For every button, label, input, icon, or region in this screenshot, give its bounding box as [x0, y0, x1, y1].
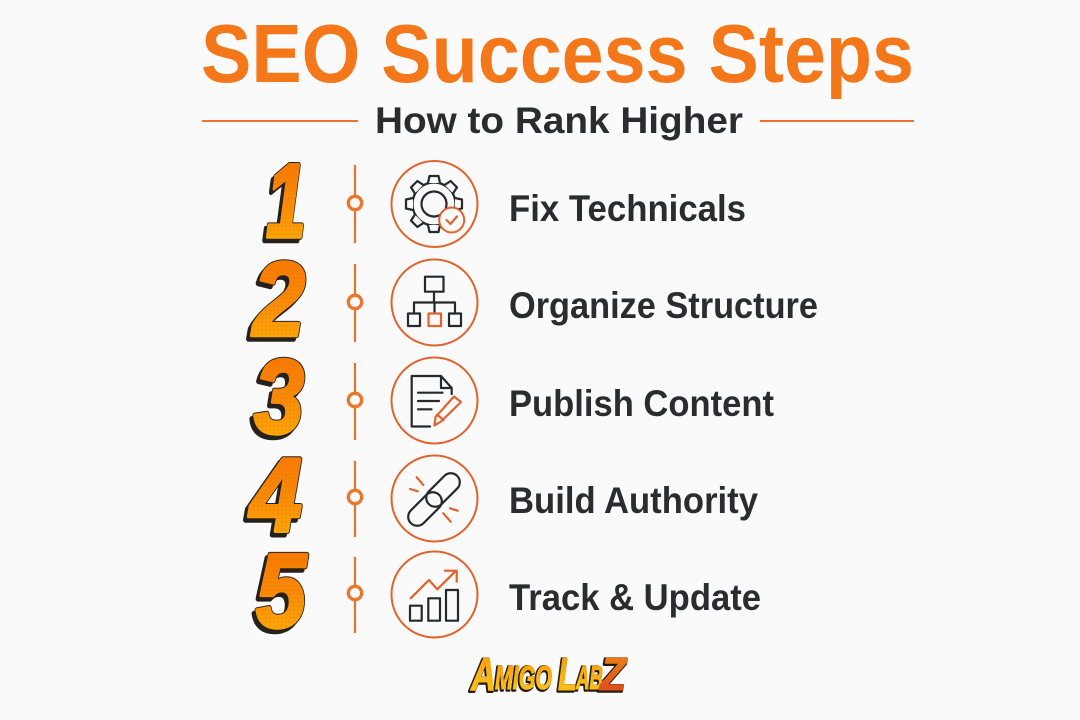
- logo: Amigo Labz: Z: [597, 649, 627, 701]
- number 5: 5: [256, 533, 307, 650]
- timeline node 4: [348, 461, 362, 537]
- logo: Amigo Labz: A: [470, 648, 496, 700]
- number 4: 4: [248, 437, 302, 554]
- number 4: 4: [248, 437, 302, 554]
- number 3: 3: [251, 342, 301, 460]
- number 4: 4: [248, 437, 302, 554]
- timeline node 3: [348, 363, 362, 440]
- number 3: 3: [254, 339, 304, 456]
- number 3: 3: [254, 339, 304, 456]
- label 2: Organize Structure: [509, 285, 818, 326]
- number 3: 3: [254, 339, 304, 456]
- number 2: 2: [251, 242, 305, 358]
- number 5: 5: [256, 533, 307, 650]
- step 5: track and update: [253, 533, 761, 654]
- number 2: 2: [248, 245, 302, 362]
- logo: Amigo Labz: [469, 648, 628, 701]
- icon: chain link: [392, 456, 478, 542]
- number 1: 1: [266, 143, 306, 260]
- logo: Amigo Labz: L: [557, 649, 576, 701]
- number 4: 4: [245, 440, 299, 558]
- logo: Amigo Labz: Z: [598, 648, 628, 700]
- timeline node 2: [348, 264, 362, 342]
- label 3: Publish Content: [509, 383, 774, 424]
- number 2: 2: [251, 242, 305, 358]
- icon: growth chart: [392, 552, 478, 638]
- step 2: organize structure: [248, 242, 818, 362]
- icon: hierarchy: [392, 260, 478, 346]
- timeline node 1: [348, 165, 362, 243]
- number 5: 5: [256, 533, 307, 650]
- step 4: build authority: [245, 437, 758, 558]
- label 4: Build Authority: [509, 480, 758, 521]
- logo: Amigo Labz: MIGO: [495, 659, 552, 696]
- number 1: 1: [263, 146, 303, 264]
- number 2: 2: [251, 242, 305, 358]
- number 1: 1: [266, 143, 306, 260]
- logo: Amigo Labz: L: [558, 648, 577, 700]
- logo: Amigo Labz: AB: [574, 660, 602, 697]
- subtitle with rules: How to Rank Higher: [375, 100, 743, 141]
- number 5: 5: [253, 536, 304, 654]
- logo: Amigo Labz: MIGO: [494, 660, 551, 697]
- title: SEO Success Steps: [201, 7, 914, 100]
- logo: Amigo Labz: A: [469, 649, 495, 701]
- logo: Amigo Labz: AB: [575, 659, 603, 696]
- timeline node 5: [348, 557, 362, 633]
- step 1: fix technicals: [263, 143, 746, 264]
- label 1: Fix Technicals: [509, 188, 746, 229]
- icon: document and pencil: [392, 358, 478, 444]
- icon: gear with check: [392, 161, 478, 247]
- label 5: Track & Update: [509, 577, 761, 618]
- step 3: publish content: [251, 339, 774, 460]
- number 1: 1: [266, 143, 306, 260]
